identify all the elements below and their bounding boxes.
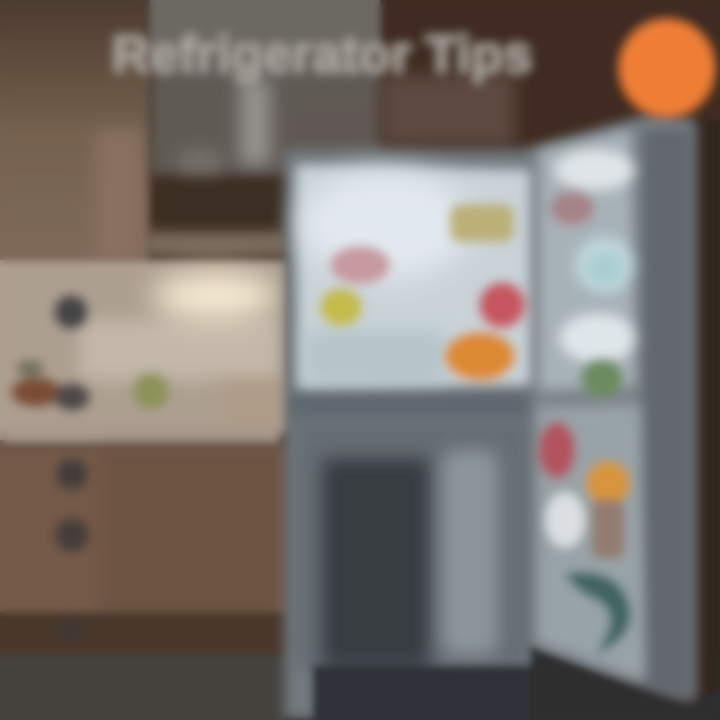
title: Refrigerator Tips bbox=[112, 26, 532, 84]
countertop edge bbox=[0, 424, 280, 444]
lower door shelves bbox=[538, 405, 645, 680]
backsplash and countertop bbox=[0, 262, 285, 432]
side panel bbox=[642, 128, 692, 698]
door shelves upper bbox=[540, 130, 636, 390]
upper cabinet highlights bbox=[180, 80, 360, 172]
bottom dark floor bbox=[530, 645, 720, 720]
fridge interior bbox=[296, 165, 530, 390]
cabinet knobs bbox=[54, 295, 89, 644]
badge: orange circle bbox=[619, 19, 715, 117]
open door frame bbox=[528, 115, 695, 700]
fridge food items bbox=[320, 191, 623, 397]
freezer drawer bbox=[295, 420, 535, 720]
floor bbox=[0, 655, 290, 720]
under-cabinet light glow bbox=[153, 272, 277, 320]
countertop items bbox=[11, 360, 169, 411]
divider band bbox=[290, 392, 530, 418]
refrigerator body bbox=[285, 115, 695, 720]
lower cabinets bbox=[0, 448, 285, 655]
